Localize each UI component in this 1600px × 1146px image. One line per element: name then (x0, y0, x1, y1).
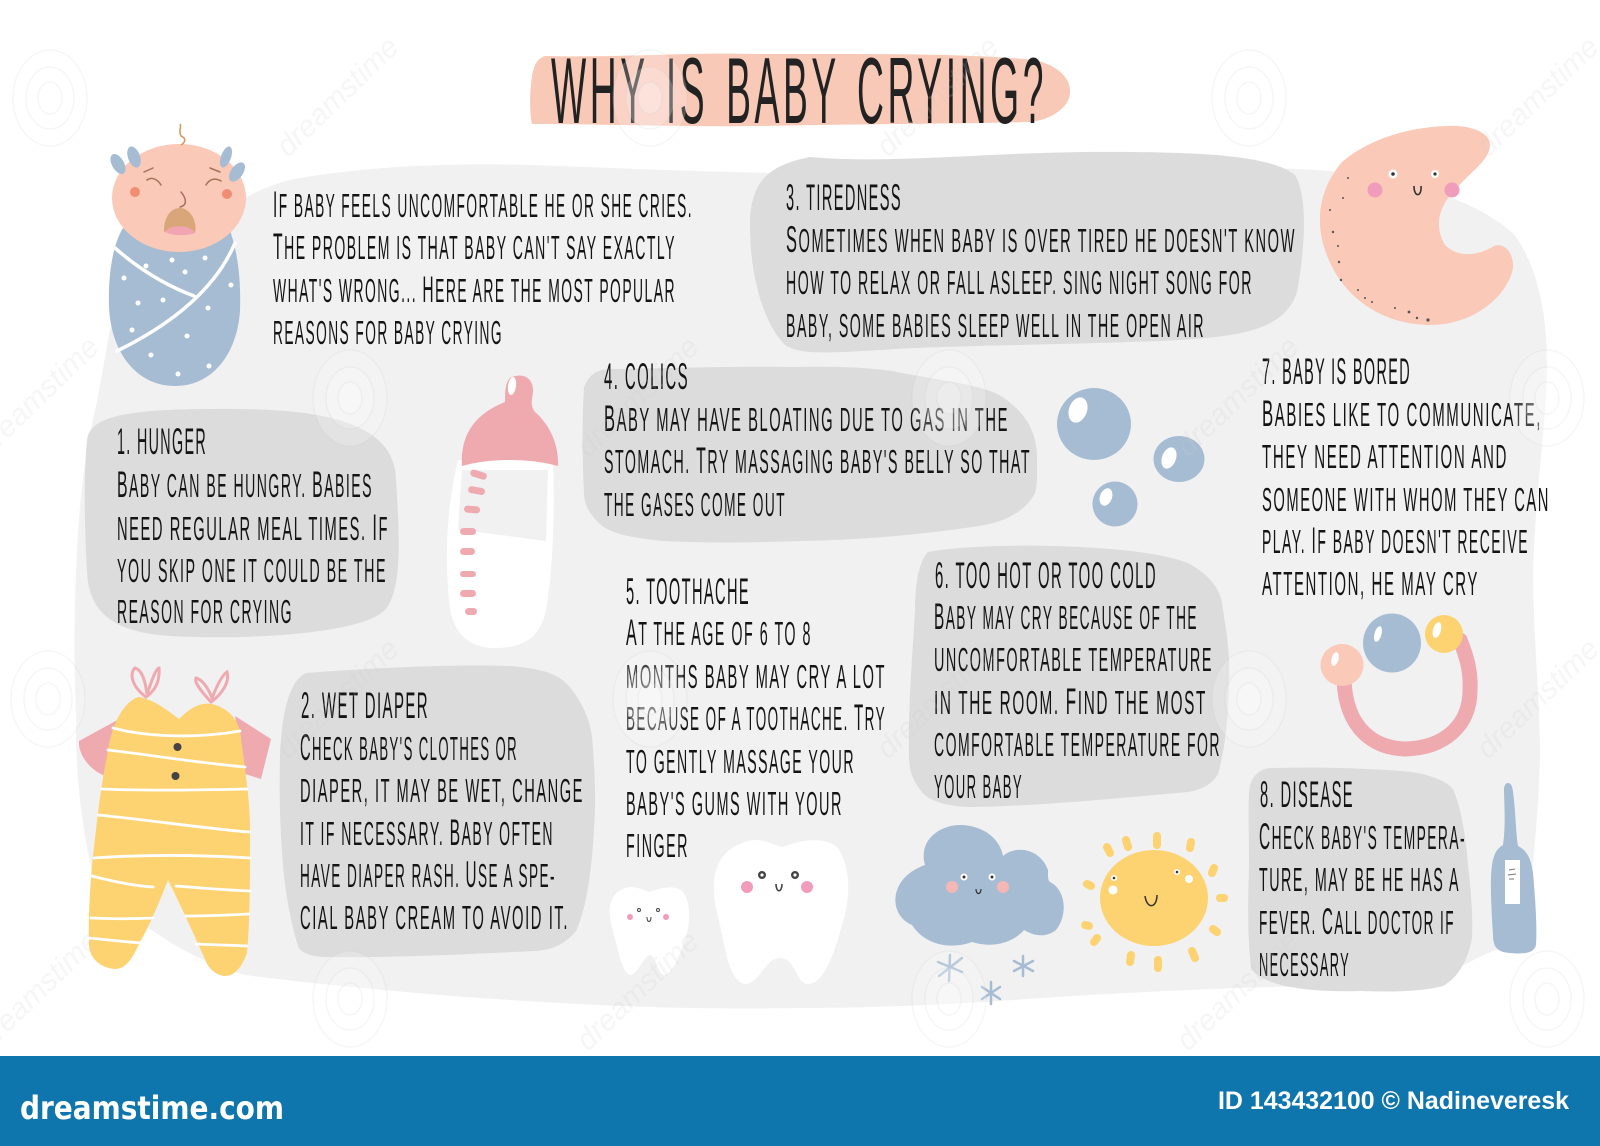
intro text: WHAT'S WRONG... HERE ARE THE MOST POPULAR (273, 269, 676, 310)
watermark: diagonal wordmarks: dreamstime (1170, 330, 1306, 463)
panel: 1. hunger: BABY CAN BE HUNGRY. BABIES (117, 464, 373, 505)
watermark: diagonal wordmarks: dreamstime (270, 30, 406, 163)
panel: 6. too hot or too cold (909, 546, 1229, 807)
section: 5. toothache: FINGER (626, 827, 689, 864)
panel: 6. too hot or too cold: 6. TOO HOT OR TOO COLD (935, 555, 1157, 596)
panel: 1. hunger (85, 409, 399, 637)
icon: baby bottle (447, 375, 558, 648)
infographic canvas: IF BABY FEELS UNCOMFORTABLE HE OR SHE CRIES. (273, 184, 693, 225)
background blob (74, 164, 1547, 1009)
icon: smiling sun (1085, 836, 1224, 968)
panel: 2. wet diaper: HAVE DIAPER RASH. USE A SPE- (300, 854, 556, 895)
intro text: REASONS FOR BABY CRYING (273, 314, 503, 351)
infographic canvas: BABY MAY CRY BECAUSE OF THE (934, 596, 1198, 637)
infographic canvas: THE PROBLEM IS THAT BABY CAN'T SAY EXACTLY (273, 226, 676, 267)
section: 5. toothache: AT THE AGE OF 6 TO 8 (626, 612, 812, 653)
infographic canvas: MONTHS BABY MAY CRY A LOT (626, 658, 886, 695)
icon: smiling moon (1320, 126, 1513, 325)
watermark: diagonal wordmarks: dreamstime (570, 924, 706, 1057)
panel: 6. too hot or too cold: YOUR BABY (934, 768, 1023, 805)
watermark: diagonal wordmarks: dreamstime (270, 632, 406, 765)
intro text (273, 184, 693, 351)
icon: yellow romper (79, 668, 271, 976)
infographic canvas: CIAL BABY CREAM TO AVOID IT. (300, 899, 569, 936)
watermark: diagonal wordmarks: dreamstime (570, 330, 706, 463)
icon: snow cloud (895, 825, 1064, 1004)
infographic canvas: BECAUSE OF A TOOTHACHE. TRY (626, 697, 886, 738)
panel: 2. wet diaper: IT IF NECESSARY. BABY OFTEN (300, 812, 554, 853)
watermark: diagonal wordmarks: dreamstime (1170, 924, 1306, 1057)
infographic canvas: UNCOMFORTABLE TEMPERATURE (934, 641, 1213, 678)
panel: 1. hunger: REASON FOR CRYING (117, 593, 293, 630)
panel: 2. wet diaper: 2. WET DIAPER (301, 685, 429, 726)
panel: 8. disease: 8. DISEASE (1260, 774, 1354, 815)
watermark: diagonal wordmarks: dreamstime (870, 30, 1006, 163)
icon: medicine ampoule (1491, 783, 1536, 953)
section: 5. toothache (626, 571, 886, 864)
panel: 1. hunger: NEED REGULAR MEAL TIMES. IF (117, 507, 389, 548)
panel: 2. wet diaper: CHECK BABY'S CLOTHES OR (300, 727, 518, 768)
panel: 8. disease (1248, 768, 1472, 991)
section: 5. toothache: BABY'S GUMS WITH YOUR (626, 785, 843, 822)
panel: 6. too hot or too cold: IN THE ROOM. FIND THE MOST (934, 681, 1207, 722)
panel: 1. hunger: 1. HUNGER (117, 421, 207, 462)
footer credit text: ID 143432100 © Nadineveresk (1218, 1087, 1569, 1115)
panel: 4. colics (582, 356, 1037, 542)
infographic canvas: COMFORTABLE TEMPERATURE FOR (934, 726, 1221, 763)
footer bar (0, 1056, 1600, 1146)
footer logo text: dreamstime.com (20, 1089, 284, 1127)
section: 5. toothache: 5. TOOTHACHE (626, 571, 750, 612)
panel: 3. tiredness (750, 152, 1304, 352)
icon: small tooth (610, 887, 689, 975)
icon: rattle toy (1320, 614, 1470, 749)
icon: bubbles (1057, 388, 1204, 526)
icon: large tooth (714, 840, 848, 984)
infographic canvas: BABY MAY HAVE BLOATING DUE TO GAS IN THE (604, 398, 1009, 439)
infographic canvas: TO GENTLY MASSAGE YOUR (626, 743, 855, 780)
watermark: diagonal wordmarks: dreamstime (870, 632, 1006, 765)
panel: 8. disease: NECESSARY (1259, 946, 1350, 983)
infographic canvas: YOU SKIP ONE IT COULD BE THE (117, 552, 387, 589)
section: 7. baby is bored (1262, 351, 1550, 602)
panel: 2. wet diaper (280, 665, 595, 957)
panel: 4. colics: THE GASES COME OUT (604, 486, 786, 523)
title highlight (530, 54, 1070, 126)
panel: 4. colics: 4. COLICS (604, 356, 689, 397)
panel: 3. tiredness: 3. TIREDNESS (786, 177, 902, 218)
infographic canvas: DIAPER, IT MAY BE WET, CHANGE (300, 772, 584, 809)
panel: 4. colics: STOMACH. TRY MASSAGING BABY'S BELLY SO THAT (604, 440, 1031, 481)
icon: crying swaddled baby (107, 124, 248, 386)
